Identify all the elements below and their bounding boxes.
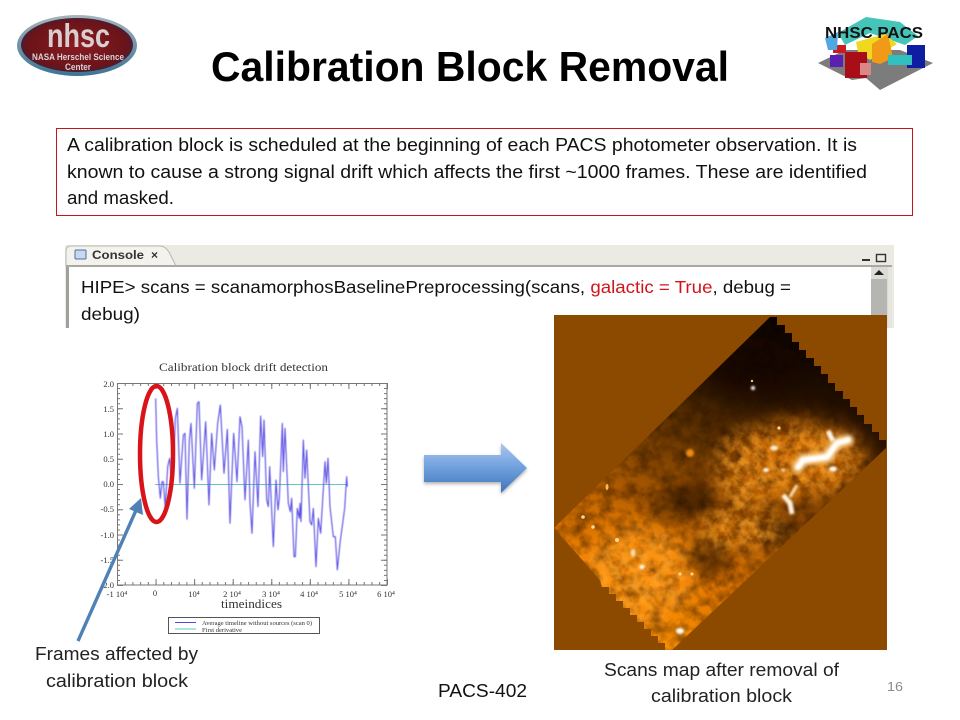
console command continued: debug) — [81, 304, 140, 324]
footer label: PACS-402 — [438, 681, 527, 701]
legend — [168, 618, 320, 634]
y axis labels: -1.5 — [101, 555, 114, 565]
average timeline curve — [156, 398, 347, 570]
chart title: Calibration block drift detection — [159, 362, 328, 374]
dust texture — [554, 390, 884, 650]
y axis labels: -0.5 — [101, 504, 114, 514]
y axis labels — [101, 379, 114, 590]
y axis labels: 2.0 — [103, 379, 114, 389]
logo: NHSC: NASA Herschel Science — [32, 52, 124, 63]
nebula glow — [565, 338, 865, 625]
y axis labels: -2.0 — [101, 580, 114, 590]
y axis labels: 0.0 — [103, 479, 114, 489]
logo: NHSC: Center — [65, 62, 91, 72]
x axis labels: 10⁴ — [188, 589, 200, 599]
callout: description box: and masked. — [67, 187, 174, 208]
plot frame and ticks — [117, 383, 388, 586]
x axis labels: -1 10⁴ — [107, 589, 127, 599]
x axis labels: 5 10⁴ — [339, 589, 357, 599]
y axis labels: 0.5 — [103, 454, 114, 464]
caption: scans map: Scans map after removal of — [604, 660, 840, 680]
legend: Average timeline without sources (scan 0) — [202, 620, 312, 627]
logo: NHSC PACS instrument — [818, 17, 933, 90]
x axis labels: 0 — [153, 588, 157, 598]
window buttons — [862, 254, 886, 262]
x axis title: timeindices — [221, 596, 282, 611]
caption: scans map: calibration block — [651, 686, 793, 706]
arrow: pointer to affected frames — [78, 498, 143, 641]
tab close: × — [151, 248, 158, 262]
panel: console window — [65, 245, 894, 328]
arrow: large blue block arrow — [424, 443, 527, 493]
chart: calibration block drift detection — [101, 362, 395, 634]
logo: NHSC — [17, 15, 137, 76]
y axis labels: 1.5 — [103, 404, 114, 414]
y axis labels: -1.0 — [101, 530, 114, 540]
callout: description box: A calibration block is scheduled at the beginning of each PACS photometer observation. It is — [67, 134, 857, 155]
title: Calibration Block Removal — [211, 43, 729, 90]
tab label: Console — [92, 250, 144, 262]
x axis labels — [107, 588, 395, 599]
caption: frames affected: calibration block — [46, 671, 189, 691]
caption: frames affected — [35, 644, 198, 691]
console command: HIPE> scans = scanamorphosBaselinePreprocessing(scans, galactic = True , debug = — [81, 277, 791, 297]
first derivative line — [155, 484, 347, 486]
image: scans map — [554, 315, 887, 650]
callout: red ellipse around affected frames — [140, 386, 173, 522]
caption: scans map — [604, 660, 840, 706]
y axis labels: 1.0 — [103, 429, 114, 439]
x axis labels: 2 10⁴ — [223, 589, 241, 599]
icon: console tab — [75, 250, 86, 259]
logo: NHSC: nhsc — [47, 17, 110, 54]
wispy filaments — [590, 424, 862, 620]
callout: description box: known to cause a strong signal drift which affects the first ~1000 frames. These are identified — [67, 161, 867, 182]
bright structures — [581, 380, 848, 634]
logo: NHSC PACS instrument: NHSC PACS — [825, 25, 923, 42]
caption: frames affected: Frames affected by — [35, 644, 198, 664]
x axis labels: 3 10⁴ — [262, 589, 280, 599]
scroll arrow — [874, 270, 884, 275]
slide number: 16 — [887, 679, 903, 694]
x axis labels: 6 10⁴ — [377, 589, 395, 599]
callout: description box — [56, 128, 912, 216]
x axis labels: 4 10⁴ — [300, 589, 318, 599]
legend: First derivative — [202, 627, 242, 634]
